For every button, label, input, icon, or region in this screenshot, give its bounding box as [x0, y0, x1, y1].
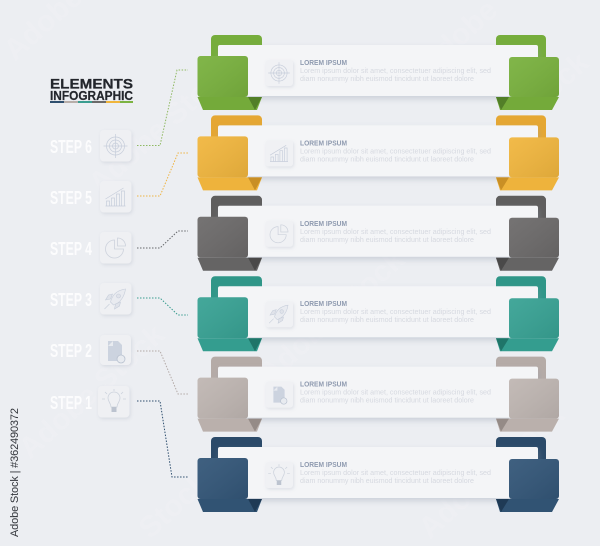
watermark: Stock [513, 46, 596, 125]
connector 2 [137, 351, 188, 394]
connector 3 [137, 298, 188, 315]
title: INFOGRAPHIC [50, 89, 133, 103]
row 4 grey [198, 196, 559, 271]
row 6 green: Lorem ipsum dolor sit amet, consectetuer adipiscing elit, sed [300, 68, 491, 75]
stock credit: Adobe Stock | #362490372 [9, 408, 21, 537]
connector 5 [137, 153, 188, 196]
row 5 amber [198, 115, 559, 190]
row 3 teal: Lorem ipsum dolor sit amet, consectetuer adipiscing elit, sed [300, 309, 491, 316]
row 3 teal [198, 276, 559, 351]
step 2 [50, 335, 131, 365]
watermark: Adobe Stock [253, 243, 411, 390]
row 1 navy [198, 437, 559, 512]
step 6 [50, 130, 132, 162]
row 1 navy: diam nonummy nibh euismod tincidunt ut laoreet dolore [300, 478, 474, 485]
step 5: STEP 5 [50, 188, 92, 208]
row 2 taupe: Lorem ipsum dolor sit amet, consectetuer adipiscing elit, sed [300, 390, 491, 397]
row 2 taupe: LOREM IPSUM [300, 380, 347, 389]
step 2: STEP 2 [50, 341, 92, 361]
row 4 grey: Lorem ipsum dolor sit amet, consectetuer adipiscing elit, sed [300, 229, 491, 236]
row 2 taupe [198, 357, 559, 432]
row 5 amber: LOREM IPSUM [300, 138, 347, 147]
watermark: Adobe Stock [83, 53, 241, 200]
row 6 green: diam nonummy nibh euismod tincidunt ut laoreet dolore [300, 76, 474, 83]
row 1 navy: LOREM IPSUM [300, 460, 347, 469]
step 6: STEP 6 [50, 137, 92, 157]
row 4 grey: LOREM IPSUM [300, 219, 347, 228]
watermark: Adobe Stock [13, 318, 171, 465]
connector 1 [137, 401, 188, 477]
step 3: STEP 3 [50, 290, 92, 310]
title: ELEMENTS [50, 76, 133, 92]
row 6 green [198, 35, 559, 110]
row 1 navy: Lorem ipsum dolor sit amet, consectetuer adipiscing elit, sed [300, 470, 491, 477]
row 5 amber: Lorem ipsum dolor sit amet, consectetuer adipiscing elit, sed [300, 148, 491, 155]
title [50, 76, 133, 103]
row 5 amber: diam nonummy nibh euismod tincidunt ut laoreet dolore [300, 156, 474, 163]
watermark: Adobe Stock [413, 398, 571, 545]
step 4 [50, 232, 132, 264]
step 4: STEP 4 [50, 239, 92, 259]
row 4 grey: diam nonummy nibh euismod tincidunt ut laoreet dolore [300, 237, 474, 244]
connector 4 [137, 231, 188, 248]
row 3 teal: diam nonummy nibh euismod tincidunt ut laoreet dolore [300, 317, 474, 324]
row 3 teal: LOREM IPSUM [300, 299, 347, 308]
row 2 taupe: diam nonummy nibh euismod tincidunt ut laoreet dolore [300, 398, 474, 405]
row 6 green: LOREM IPSUM [300, 58, 347, 67]
watermark: Stock [133, 466, 216, 545]
step 5 [50, 181, 132, 212]
connector 6 [137, 70, 188, 146]
step 3 [50, 283, 132, 314]
step 1 [50, 386, 130, 418]
step 1: STEP 1 [50, 393, 92, 413]
